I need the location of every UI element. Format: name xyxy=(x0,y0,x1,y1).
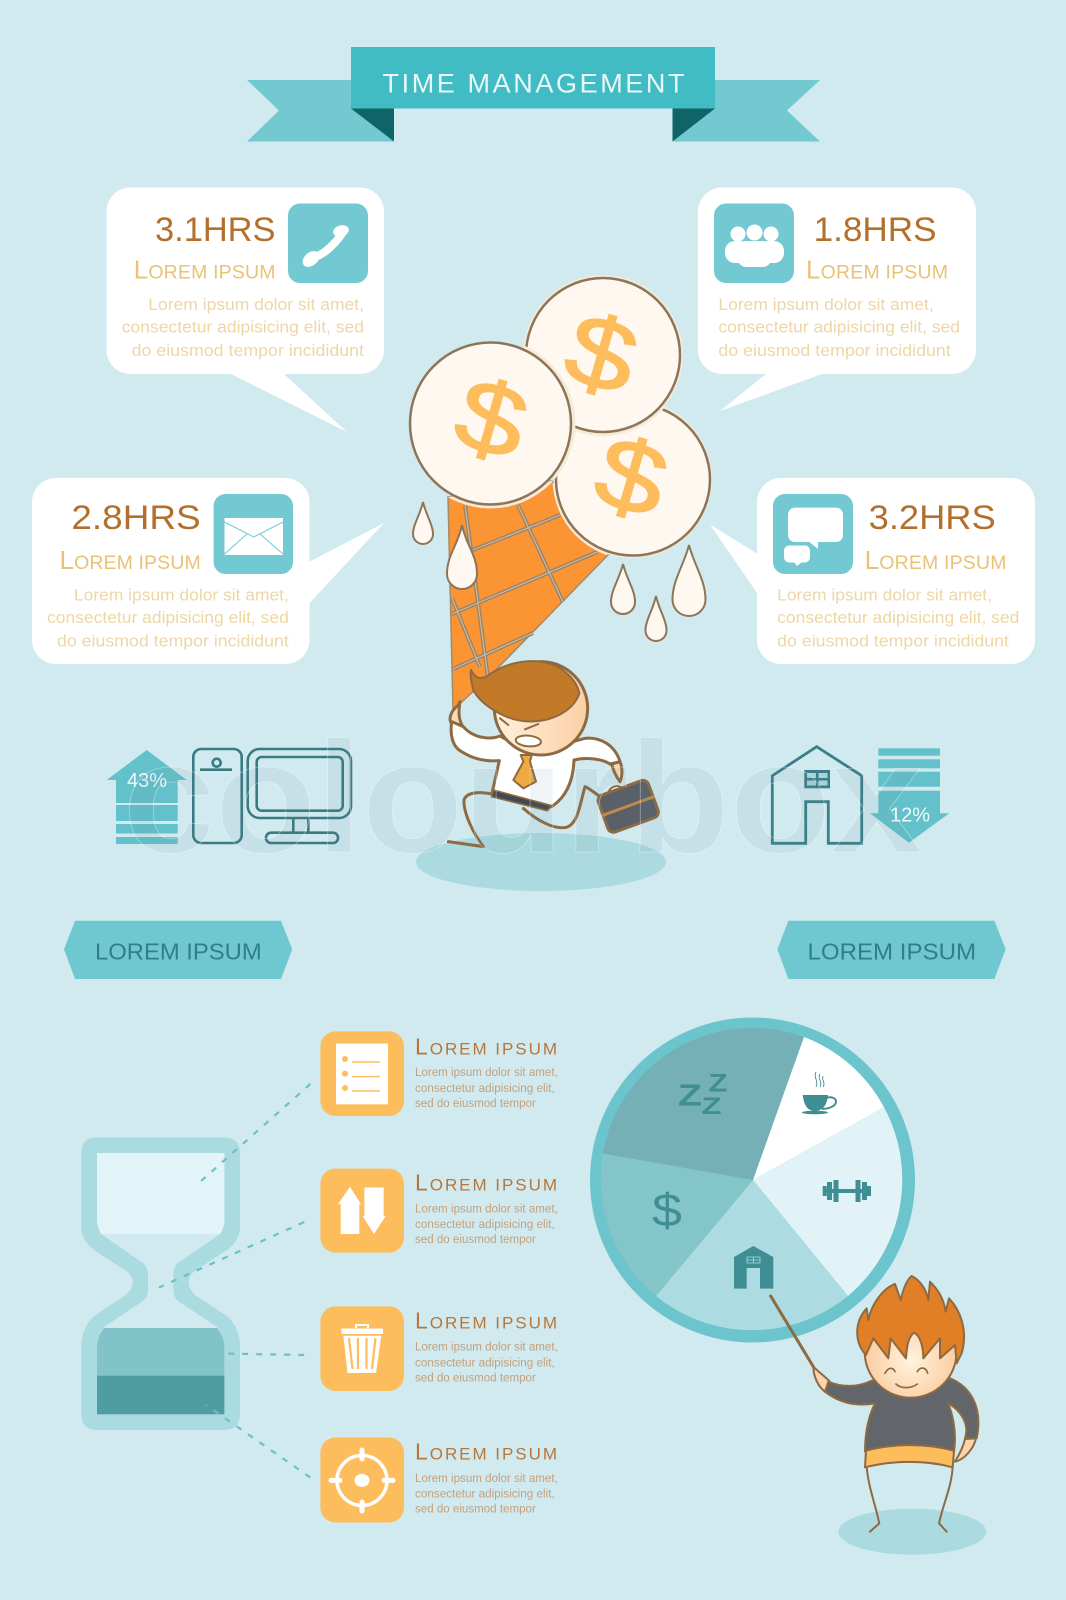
list item 2: arrows xyxy=(320,1169,558,1253)
text block: consectetur adipisicing elit, xyxy=(415,1486,555,1500)
icon: phone xyxy=(288,204,368,283)
text block: sed do eiusmod tempor xyxy=(415,1096,536,1110)
heading: LOREM IPSUM xyxy=(415,1033,557,1059)
icon: crosshair xyxy=(331,1450,393,1511)
icon: dollar: $ xyxy=(652,1184,682,1236)
text block: consectetur adipisicing elit, xyxy=(415,1355,555,1369)
text block: consectetur adipisicing elit, xyxy=(415,1217,555,1231)
text: description: consectetur adipisicing elit, sed xyxy=(777,609,1019,627)
icon: sleep: Z xyxy=(678,1078,702,1112)
heading: LOREM IPSUM xyxy=(415,1439,557,1465)
text block: Lorem ipsum dolor sit amet, xyxy=(415,1065,558,1079)
text block: sed do eiusmod tempor xyxy=(415,1502,536,1516)
watermark: colourbox xyxy=(123,710,923,886)
text: description: Lorem ipsum dolor sit amet, xyxy=(74,587,289,605)
ground shadow: presenter xyxy=(838,1509,986,1555)
text: 43%: 43% xyxy=(127,770,167,792)
section label: left: LOREM IPSUM xyxy=(95,938,262,964)
section label: right: LOREM IPSUM xyxy=(808,938,976,964)
melting drips xyxy=(413,502,706,641)
icon: sleep xyxy=(678,1070,728,1120)
dollar coin scoops: $ xyxy=(553,291,649,417)
text block xyxy=(415,1065,558,1110)
text: subtitle: LOREM IPSUM xyxy=(806,254,948,284)
arrow: 43% up xyxy=(107,750,187,844)
title text: TIME MANAGEMENT xyxy=(382,68,684,98)
text block: Lorem ipsum dolor sit amet, xyxy=(415,1471,558,1485)
slice: sleep xyxy=(603,1028,804,1180)
text: subtitle: LOREM IPSUM xyxy=(60,545,201,575)
heading: LOREM IPSUM xyxy=(415,1308,557,1334)
icon: house outline xyxy=(772,747,862,843)
hourglass xyxy=(81,1138,240,1430)
text: description: consectetur adipisicing elit, sed xyxy=(122,319,364,337)
icon: desktop computer xyxy=(193,749,351,843)
text: description xyxy=(122,296,364,360)
text: description xyxy=(777,587,1019,650)
text block: Lorem ipsum dolor sit amet, xyxy=(415,1202,558,1216)
pie chart xyxy=(590,1018,915,1342)
text block: consectetur adipisicing elit, xyxy=(415,1081,555,1095)
text block xyxy=(415,1202,558,1246)
icon: coffee cup xyxy=(802,1072,836,1114)
list item 1: checklist xyxy=(320,1031,558,1116)
text block: sed do eiusmod tempor xyxy=(415,1232,536,1246)
dollar coin scoops xyxy=(406,274,714,560)
slice: home xyxy=(656,1180,848,1330)
slice: coffee xyxy=(753,1037,884,1180)
text: 3.2HRS: 3.2HRS xyxy=(869,499,996,537)
icon: envelope xyxy=(214,494,293,574)
ice cream cone xyxy=(448,481,608,710)
callout: 1.8 hours people xyxy=(698,188,976,411)
list item 4: target xyxy=(320,1438,558,1522)
icon: house xyxy=(734,1246,773,1289)
arrow: 12% down xyxy=(870,748,949,843)
sand: darker layer xyxy=(97,1376,224,1414)
text block: Lorem ipsum dolor sit amet, xyxy=(415,1340,558,1354)
character: running businessman xyxy=(448,661,660,847)
icon: people xyxy=(714,204,794,283)
sand: lighter layer xyxy=(97,1328,224,1376)
callout: 3.2 hours chat xyxy=(710,478,1035,664)
text: description: consectetur adipisicing elit, sed xyxy=(718,319,960,337)
ground shadow: running man xyxy=(416,833,666,891)
text block xyxy=(415,1340,558,1384)
callout: 3.1 hours phone xyxy=(106,188,384,432)
text: description: do eiusmod tempor incididunt xyxy=(57,632,289,650)
text: description: Lorem ipsum dolor sit amet, xyxy=(777,587,992,605)
text: 12%: 12% xyxy=(890,805,930,827)
icon: sleep: Z xyxy=(708,1070,728,1098)
text: description: Lorem ipsum dolor sit amet, xyxy=(148,296,364,314)
character: presenter with pointer xyxy=(771,1276,978,1532)
dollar coin scoops: $ xyxy=(583,414,679,540)
text: 2.8HRS: 2.8HRS xyxy=(71,499,201,537)
text block: sed do eiusmod tempor xyxy=(415,1370,536,1384)
icon: trash can xyxy=(341,1325,383,1373)
text: description: do eiusmod tempor incididunt xyxy=(132,342,364,360)
text block xyxy=(415,1471,558,1516)
heading: LOREM IPSUM xyxy=(415,1169,557,1195)
text: subtitle: LOREM IPSUM xyxy=(134,254,276,284)
text: 1.8HRS: 1.8HRS xyxy=(814,211,937,249)
icon: sleep: Z xyxy=(702,1093,722,1120)
icon: document xyxy=(336,1044,388,1104)
title banner xyxy=(247,47,820,142)
text: description: consectetur adipisicing elit, sed xyxy=(47,609,289,627)
text: description: Lorem ipsum dolor sit amet, xyxy=(718,296,934,314)
icon: up and down arrows xyxy=(338,1187,386,1234)
list item 3: trash xyxy=(320,1306,558,1391)
text: description xyxy=(47,587,289,650)
text: description xyxy=(718,296,960,360)
text: 3.1HRS: 3.1HRS xyxy=(155,211,276,249)
text: description: do eiusmod tempor incididunt xyxy=(777,632,1009,650)
icon: chat bubbles xyxy=(773,494,853,574)
slice: money xyxy=(601,1154,753,1296)
section label: right xyxy=(777,921,1006,979)
icon: dumbbell xyxy=(823,1180,871,1202)
dollar coin scoops: $ xyxy=(443,356,539,482)
top glass xyxy=(97,1153,224,1234)
text: description: do eiusmod tempor incididunt xyxy=(718,342,951,360)
dotted connector lines xyxy=(159,1084,310,1478)
section label: left xyxy=(64,921,292,979)
text: subtitle: LOREM IPSUM xyxy=(865,545,1006,575)
slice: exercise xyxy=(753,1107,902,1296)
callout: 2.8 hours mail xyxy=(32,478,384,664)
